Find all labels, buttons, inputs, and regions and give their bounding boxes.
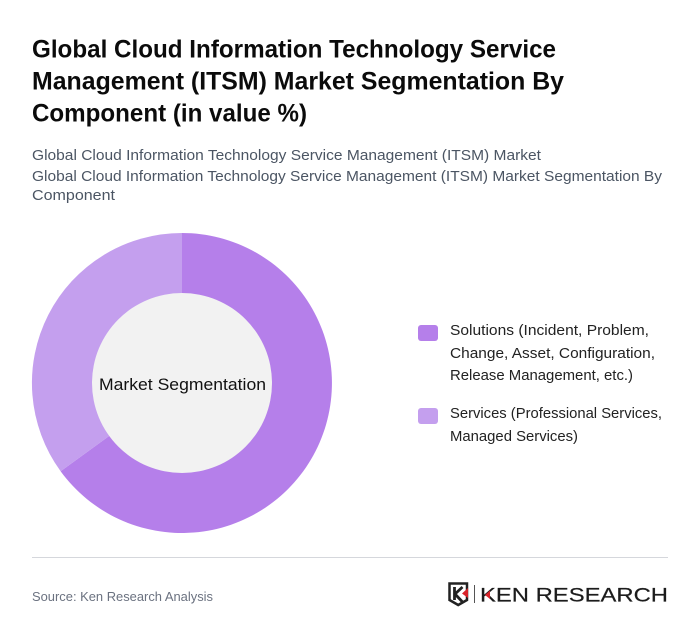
donut centre [92, 293, 272, 473]
title [32, 36, 564, 128]
legend item: services [418, 405, 662, 445]
subtitle: Global Cloud Information Technology Service Management (ITSM) Market [32, 147, 542, 164]
centre label: Market Segmentation [99, 375, 266, 394]
segment: solutions [61, 233, 332, 533]
legend item: solutions: Solutions (Incident, Problem, [450, 322, 649, 339]
legend item: services: Services (Professional Services, [450, 405, 662, 422]
logo: Ken Research [450, 584, 668, 606]
legend item: services: Managed Services) [450, 428, 578, 445]
donut chart [32, 233, 332, 533]
source note: Source: Ken Research Analysis [32, 589, 213, 604]
wordmark: KEN RESEARCH [480, 584, 668, 606]
title: Global Cloud Information Technology Service [32, 36, 556, 64]
legend item: solutions: Release Management, etc.) [450, 367, 633, 384]
subtitle: Global Cloud Information Technology Service Management (ITSM) Market Segmentation By [32, 168, 663, 185]
legend item: solutions: Change, Asset, Configuration, [450, 345, 655, 362]
title: Management (ITSM) Market Segmentation By [32, 68, 564, 96]
icon: shield [450, 584, 468, 605]
segment: services [32, 233, 182, 471]
subtitle [32, 147, 663, 204]
title: Component (in value %) [32, 100, 307, 128]
legend item: solutions [418, 322, 655, 384]
subtitle: Component [32, 187, 116, 204]
legend [418, 322, 662, 445]
